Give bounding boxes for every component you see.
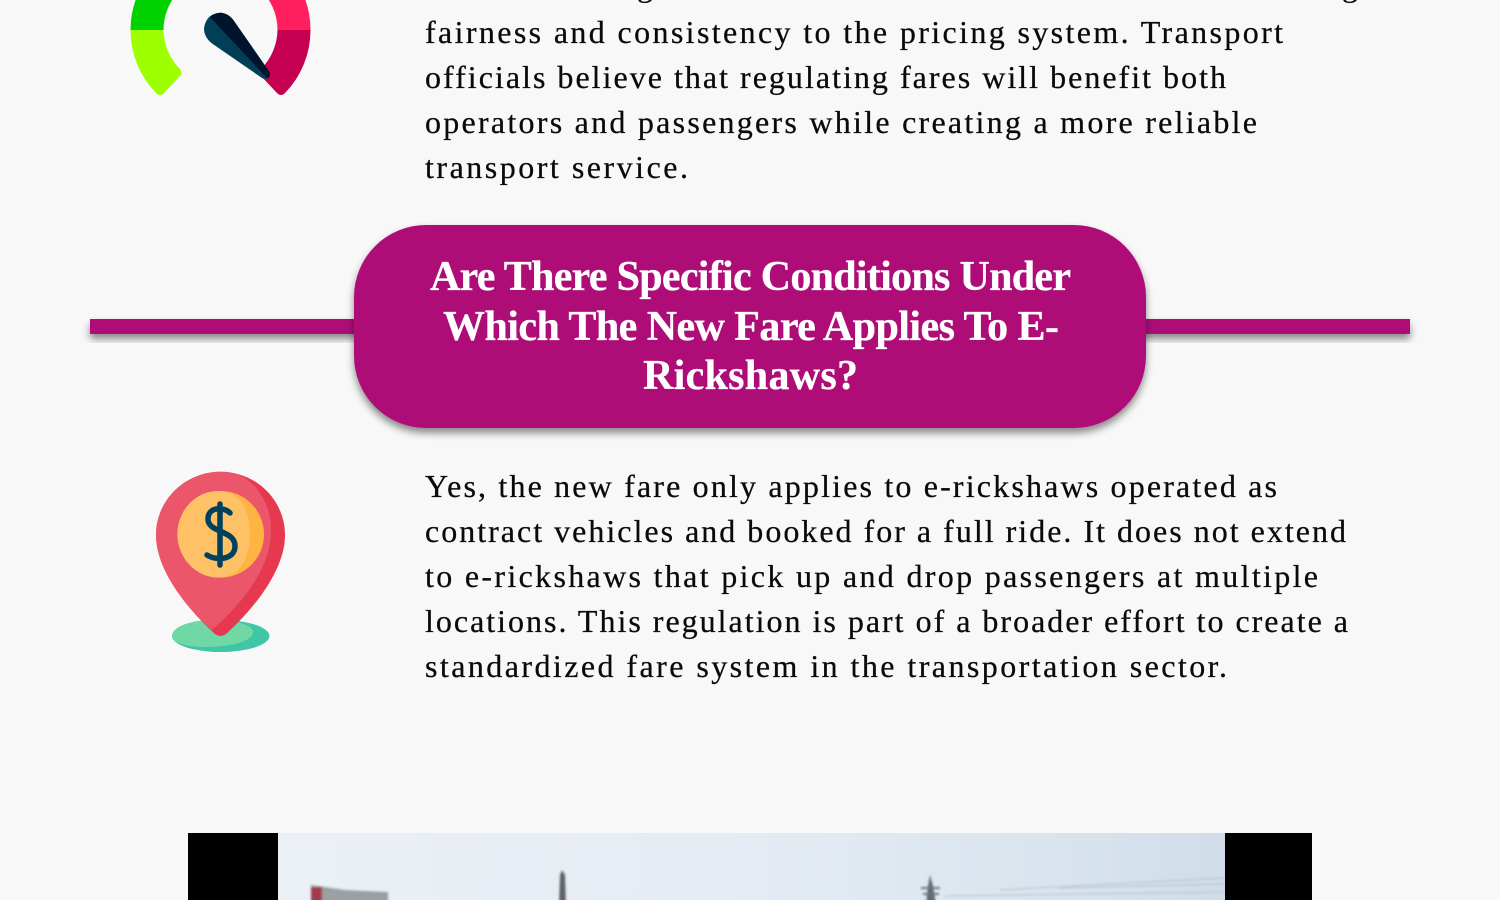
text block: conditions answer: to e-rickshaws that pick up and drop passengers at multiple <box>425 558 1318 594</box>
heading pill: Are There Specific Conditions Under <box>430 254 1071 300</box>
text block: conditions answer: contract vehicles and booked for a full ride. It does not extend <box>425 513 1346 549</box>
text block: fairness answer <box>425 0 1358 185</box>
text block: conditions answer: standardized fare system in the transportation sector. <box>425 648 1227 684</box>
text block: conditions answer <box>425 468 1348 684</box>
divider bar behind heading <box>90 319 1410 334</box>
heading pill: Which The New Fare Applies To E- <box>443 304 1059 350</box>
photo: road scene with sky, pole and pylon <box>188 833 1312 900</box>
text block: conditions answer: locations. This regulation is part of a broader effort to create a <box>425 603 1348 639</box>
text block: conditions answer: Yes, the new fare only applies to e-rickshaws operated as <box>425 468 1277 504</box>
text block: fairness answer: fairness and consistency to the pricing system. Transport <box>425 14 1283 50</box>
text block: fairness answer: operators and passengers while creating a more reliable <box>425 104 1257 140</box>
heading pill <box>354 225 1146 428</box>
icon: fare gauge speedometer <box>130 0 311 95</box>
text block: fairness answer: transport service. <box>425 149 688 185</box>
heading pill: Rickshaws? <box>643 353 858 399</box>
icon: location pin with dollar <box>156 472 285 652</box>
text block: fairness answer: officials believe that regulating fares will benefit both <box>425 59 1226 95</box>
